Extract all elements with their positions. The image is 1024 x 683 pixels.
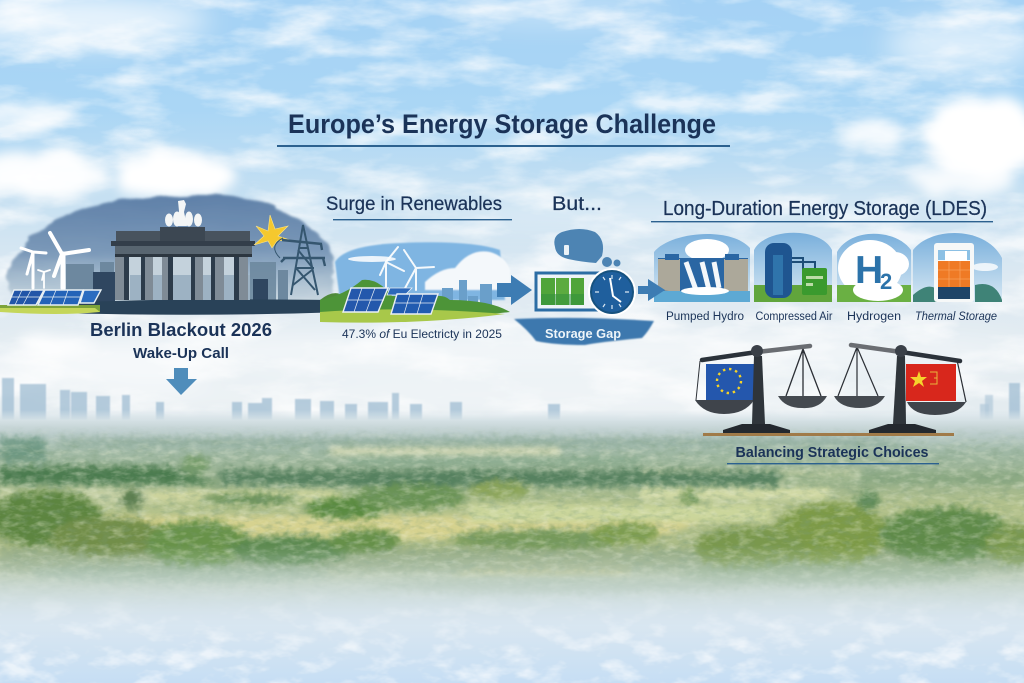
- city silhouette behind gate: [66, 262, 288, 302]
- icon: quadriga statue: [165, 200, 202, 226]
- panel: Berlin blackout: [0, 194, 345, 395]
- icon: lightning spark: [254, 215, 290, 248]
- scale: EU side: [695, 345, 827, 433]
- labels: technology names: Hydrogen: [847, 311, 901, 323]
- icon: EU flag: [706, 364, 756, 400]
- arrow: renewables to storage gap: [497, 275, 532, 305]
- illustration: renewables landscape: [320, 242, 510, 323]
- ground strip: [0, 299, 345, 315]
- arrow: down: [166, 368, 197, 395]
- farm fields: [0, 446, 860, 575]
- labels: technology names: Thermal Storage: [915, 311, 997, 323]
- labels: technology names: Compressed Air: [756, 311, 833, 323]
- landscape: [0, 410, 1024, 624]
- panel: long-duration energy storage: [651, 198, 1002, 323]
- icon: cloud shape: [554, 229, 620, 267]
- icon: wind turbines: [21, 233, 89, 288]
- tile: hydrogen: [837, 226, 911, 302]
- tile: hydrogen: 2: [880, 269, 892, 294]
- panel: surge in renewables: [320, 194, 512, 341]
- tile: thermal storage: [913, 226, 1002, 302]
- tree lines and foreground trees: [0, 438, 1024, 594]
- heading: Berlin Blackout 2026: Berlin Blackout 2026: [90, 320, 272, 340]
- icon: China flag: [906, 364, 956, 401]
- icon: Brandenburg Gate: [111, 200, 255, 300]
- label: Storage Gap: Storage Gap: [545, 326, 621, 341]
- panel: balancing strategic choices: [695, 345, 966, 464]
- distant city skyline: [2, 378, 1020, 420]
- puffy clouds: [0, 95, 1024, 356]
- arrow: storage gap to LDES: [638, 279, 665, 301]
- heading: LDES: Long-Duration Energy Storage (LDES): [663, 198, 987, 220]
- illustration: balance scales: [695, 345, 966, 436]
- icon: solar panels: [8, 290, 101, 305]
- scale: China side: [834, 345, 966, 433]
- panel: storage gap: [514, 194, 654, 345]
- label: Balancing Strategic Choices: Balancing Strategic Choices: [736, 444, 928, 461]
- icon: clock: [588, 268, 636, 316]
- subheading: Wake-Up Call: Wake-Up Call: [133, 345, 229, 362]
- labels: technology names: [666, 311, 997, 323]
- label: 47.3% of EU electricity: 47.3% of Eu Electricty in 2025: [342, 327, 502, 341]
- icon: power pylon: [275, 225, 325, 295]
- tile: compressed air: [754, 226, 832, 302]
- icon: battery: [536, 273, 602, 310]
- tile: hydrogen: H: [855, 249, 883, 292]
- storm cloud backdrop: [6, 194, 334, 306]
- label: Storage Gap: [514, 318, 654, 345]
- sky background: [0, 0, 1024, 440]
- title: Europe’s Energy Storage Challenge: [288, 109, 716, 139]
- heading: Surge in Renewables: Surge in Renewables: [326, 194, 502, 215]
- heading: But...: But...: [552, 194, 602, 215]
- tile: pumped hydro: [654, 234, 750, 302]
- labels: technology names: Pumped Hydro: [666, 311, 744, 323]
- low cloud bank: [0, 545, 1024, 683]
- icon: solar panels: [343, 288, 438, 314]
